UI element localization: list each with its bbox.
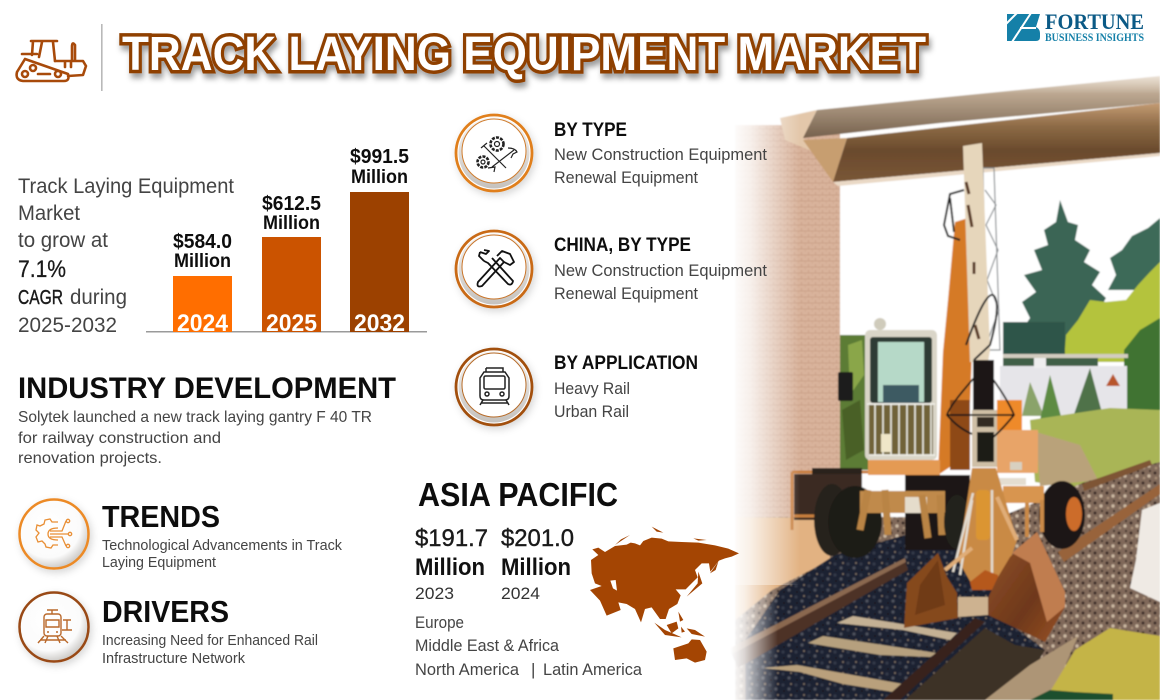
text: CAGR statement: 2025-2032 [18,314,117,337]
far trees [840,200,1160,470]
text: trends body [102,538,343,571]
icon: hammer and wrench [456,231,532,307]
text: industry development body [18,409,372,467]
heading: China, by type: CHINA, BY TYPE [554,235,691,256]
text: CAGR statement: to grow at [18,229,108,252]
text: CAGR statement: 7.1% [18,256,66,283]
heading: industry development: INDUSTRY DEVELOPMENT [18,372,396,405]
stat: 2024 [501,525,574,603]
text: application items: Urban Rail [554,402,629,421]
concrete wall [1000,366,1127,416]
text: trends body: Laying Equipment [102,555,216,571]
ground [735,462,1160,700]
bar 2032 [350,146,409,337]
text: drivers body: Infrastructure Network [102,651,246,667]
text: CAGR statement: Market [18,202,80,225]
icon: metro train [456,349,532,425]
text: industry development body: for railway construction and [18,430,221,447]
list: other regions: | [531,660,535,679]
icon: train [20,592,88,662]
bar chart: market size [146,146,427,337]
stat: 2024: $201.0 [501,525,574,552]
bar 2025: Million [263,213,320,234]
heading: Asia Pacific: ASIA PACIFIC [418,476,618,513]
text: by type items [554,145,767,187]
panel: China, by type [456,231,767,307]
panel: trends [20,499,343,571]
icon: gears and wrench [456,115,532,191]
text: trends body: Technological Advancements in Track [102,538,343,554]
text: CAGR statement: during [70,286,127,309]
icon: tech gear [20,500,88,568]
logo: Fortune Business Insights: FORTUNE [1045,9,1144,34]
rails and sleepers [730,460,1160,700]
stat: 2023 [415,525,488,603]
stat: 2023: 2023 [415,584,454,603]
bar 2025: $612.5 [262,193,321,215]
bar 2032: $991.5 [350,146,409,168]
list: other regions: Latin America [543,660,643,679]
text: industry development body: renovation projects. [18,450,162,467]
heading: drivers: DRIVERS [102,594,229,629]
text: China items [554,261,767,303]
bar 2025 [262,193,321,337]
white stone block [1130,503,1160,602]
stat: 2024: 2024 [501,584,540,603]
title: TRACK LAYING EQUIPMENT MARKET [122,28,926,81]
bar 2025: 2025 [266,310,317,337]
bar 2024 [173,231,232,337]
panel: by application [456,349,698,425]
text: CAGR statement: CAGR [18,287,63,309]
text: by type items: Renewal Equipment [554,168,698,187]
hydraulic column [945,360,1017,590]
text: drivers body: Increasing Need for Enhanced Rail [102,633,318,649]
text: China items: New Construction Equipment [554,261,767,280]
brick wall [735,125,840,517]
bar 2032: 2032 [354,310,405,337]
list: other regions: North America [415,660,520,679]
text: China items: Renewal Equipment [554,284,698,303]
basket [792,468,868,530]
boom [963,143,990,362]
orange machine body [938,218,1038,475]
text: CAGR statement [18,175,234,337]
heading: by type: BY TYPE [554,120,627,141]
text: by type items: New Construction Equipment [554,145,767,164]
list: other regions [415,613,643,679]
map: Asia Pacific [590,527,739,663]
bar 2024: $584.0 [173,231,232,253]
heading: trends: TRENDS [102,499,220,534]
grass [1030,408,1160,490]
stat: 2024: Million [501,554,571,581]
bridge [780,76,1160,186]
list: other regions: Middle East & Africa [415,636,560,655]
text: application items [554,379,630,421]
lattice tower [983,168,1000,350]
text: drivers body [102,633,318,667]
bar 2032: Million [351,167,408,188]
wheels and chassis [814,475,1085,558]
panel: by type [456,115,767,191]
text: CAGR statement: Track Laying Equipment [18,175,234,198]
text: industry development body: Solytek launched a new track laying gantry F 40 TR [18,409,372,426]
cab [838,318,940,475]
stat: 2023: $191.7 [415,525,488,552]
logo: Fortune Business Insights [1006,9,1144,44]
stat: 2023: Million [415,554,485,581]
grapple bucket [904,532,1065,642]
text: application items: Heavy Rail [554,379,630,398]
bar 2024: Million [174,251,231,272]
list: other regions: Europe [415,613,464,632]
panel: drivers [20,592,318,667]
bar 2024: 2024 [177,310,229,337]
logo mark [1006,13,1040,42]
photo: track laying machine on railway under a bridge [730,60,1160,700]
header divider [101,24,103,91]
icon: bulldozer [17,41,86,81]
heading: by application: BY APPLICATION [554,353,698,374]
